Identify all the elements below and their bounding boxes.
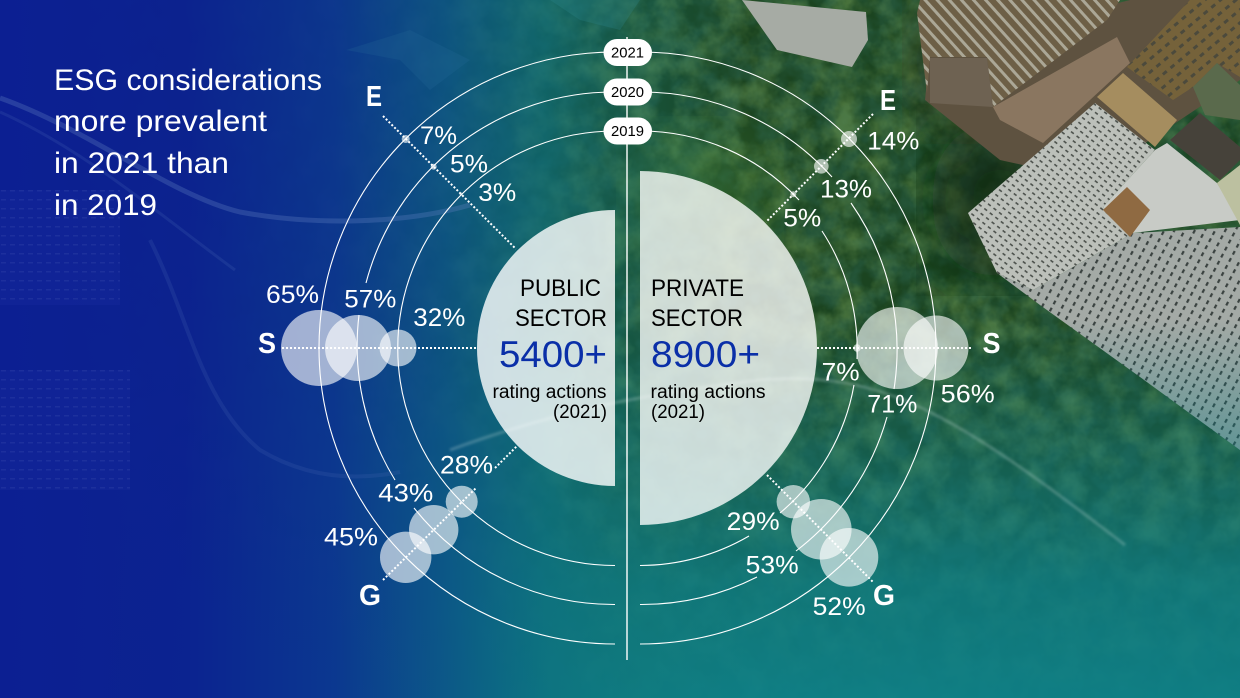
central vertical axis (626, 37, 628, 660)
dotted axes (282, 114, 973, 582)
percent labels: public sector: 32% (413, 304, 465, 332)
title: more prevalent (54, 105, 268, 138)
year labels: 2019 (611, 123, 644, 140)
percent labels: public sector: 57% (344, 285, 396, 313)
year labels: 2021 (611, 44, 644, 62)
panel: private sector half disc: 8900+ (651, 334, 760, 375)
concentric year arcs (319, 52, 936, 644)
percent labels: private sector: 53% (746, 551, 799, 579)
percent labels: public sector: 65% (266, 281, 319, 309)
bubbles: private sector S (853, 307, 968, 389)
year labels: 2020 (611, 84, 644, 101)
panel: public sector half disc: SECTOR (515, 305, 607, 332)
panel: public sector half disc: PUBLIC (520, 275, 601, 302)
percent labels: public sector (266, 122, 516, 551)
axis letters E S G: S (258, 328, 276, 360)
panel: public sector half disc: (2021) (553, 402, 607, 423)
percent labels: public sector: 43% (378, 479, 433, 507)
title (54, 64, 322, 222)
bubbles: public sector S (281, 310, 416, 386)
panel: private sector half disc (640, 171, 817, 525)
axis letters E S G: E (366, 81, 382, 113)
percent labels: private sector: 56% (941, 380, 995, 408)
panel: private sector half disc: rating actions (650, 382, 766, 403)
axis letters E S G: E (880, 85, 896, 117)
panel: public sector half disc: rating actions (492, 382, 606, 403)
percent labels: private sector: 5% (783, 205, 821, 233)
bubbles: private sector G (777, 485, 878, 587)
panel: private sector half disc: (2021) (651, 402, 705, 423)
title: in 2021 than (54, 147, 229, 180)
percent labels: private sector: 7% (822, 359, 860, 387)
percent labels: private sector: 13% (820, 176, 872, 204)
bubbles: public sector G (380, 486, 478, 583)
percent labels: private sector: 29% (727, 508, 780, 536)
title: in 2019 (54, 189, 157, 222)
panel: private sector half disc: SECTOR (651, 305, 743, 332)
percent labels: public sector: 28% (440, 451, 493, 479)
year labels (604, 39, 652, 144)
axis letters E S G: G (873, 580, 895, 612)
percent labels: private sector (727, 127, 995, 621)
percent labels: private sector: 71% (867, 391, 917, 419)
percent labels: private sector: 14% (867, 127, 919, 155)
axis letters E S G: G (359, 580, 381, 612)
percent labels: public sector: 45% (324, 523, 378, 551)
title: ESG considerations (54, 64, 322, 97)
percent labels: public sector: 7% (420, 122, 457, 150)
panel: private sector half disc: PRIVATE (651, 275, 744, 302)
bubbles: private sector E (790, 131, 857, 197)
bubbles: public sector E (402, 135, 462, 196)
percent labels: private sector: 52% (813, 593, 866, 621)
panel: public sector half disc: 5400+ (499, 334, 607, 375)
axis letters E S G: S (982, 328, 1000, 360)
percent labels: public sector: 5% (450, 151, 488, 179)
axis letters E S G (258, 81, 1000, 612)
percent labels: public sector: 3% (478, 179, 516, 207)
panel: public sector half disc (477, 210, 615, 486)
